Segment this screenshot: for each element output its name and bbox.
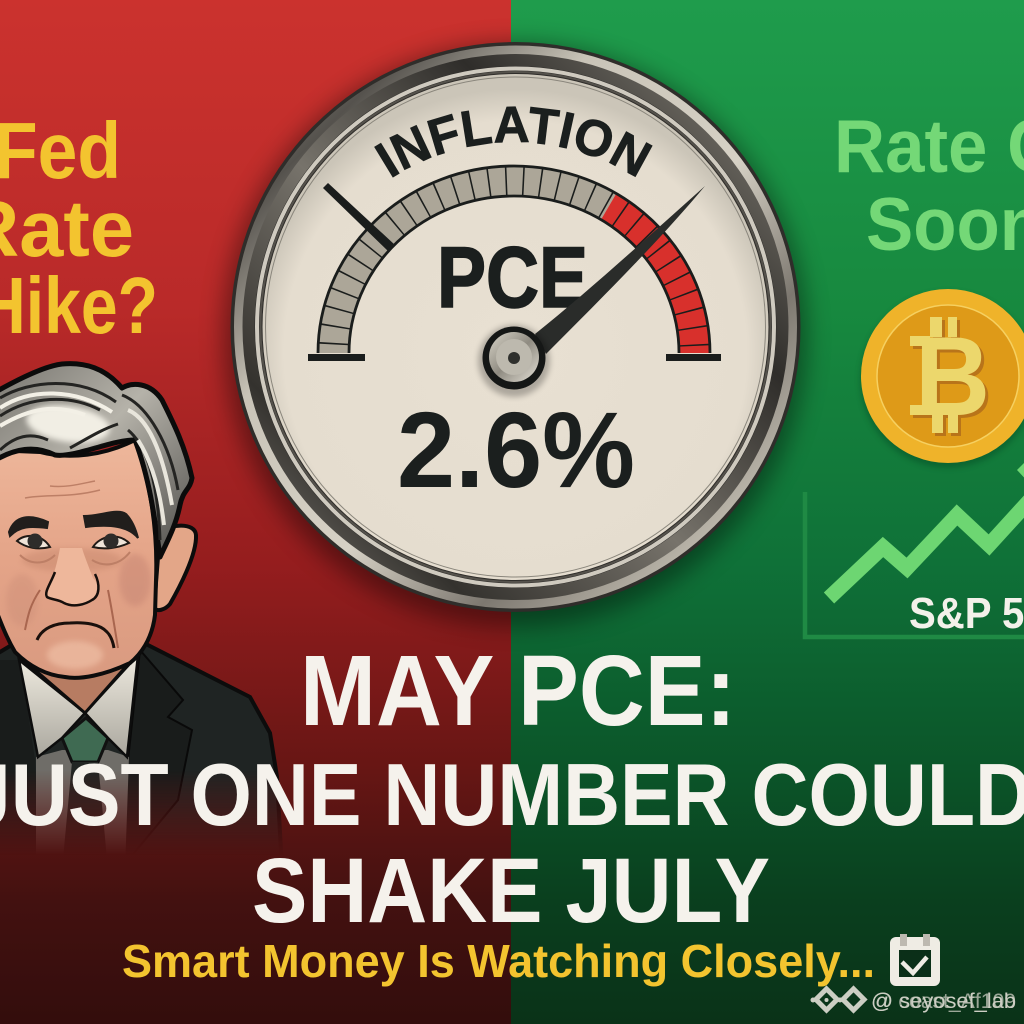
right headline: Rate Cut Soon bbox=[834, 104, 1024, 266]
icon: bitcoin coin: B bbox=[915, 314, 990, 439]
eyes bbox=[17, 536, 50, 548]
nasolabial lines bbox=[25, 590, 118, 648]
scale outlines bbox=[318, 166, 710, 353]
watermark handle: @ seyosef_lab bbox=[871, 990, 1016, 1013]
hair bbox=[0, 364, 192, 557]
watermark bbox=[810, 989, 1016, 1013]
needle bbox=[535, 186, 705, 354]
scale end bars bbox=[308, 354, 365, 361]
icon: bitcoin coin bbox=[860, 289, 1024, 468]
ear bbox=[154, 526, 196, 610]
background: green right panel bbox=[511, 0, 1024, 1024]
chart: S&P 500 line chart bbox=[805, 457, 1024, 638]
inflation gauge bbox=[230, 42, 800, 612]
illustration: Powell portrait bbox=[0, 364, 282, 870]
icon: calendar check bbox=[890, 934, 940, 986]
center label: PCE bbox=[437, 230, 588, 326]
scale ticks bbox=[333, 181, 695, 353]
watermark: @ coast_Af109 bbox=[871, 990, 1016, 1013]
title: MAY PCE: bbox=[300, 635, 736, 747]
subtitle: Smart Money Is Watching Closely... bbox=[122, 935, 875, 987]
scale: grey zone bbox=[333, 180, 609, 353]
lapel bbox=[128, 652, 193, 829]
eye bags bbox=[20, 552, 130, 564]
eyebrows bbox=[9, 517, 48, 536]
left question: Fed Rate Hike? bbox=[0, 106, 158, 350]
suit bbox=[0, 643, 282, 846]
low limit marker bbox=[323, 183, 395, 252]
value: 2.6% bbox=[397, 389, 635, 510]
bezel bbox=[230, 42, 800, 612]
shirt under tie bbox=[36, 750, 129, 848]
title: SHAKE JULY bbox=[252, 840, 770, 942]
dial face bbox=[262, 74, 768, 580]
cheek shading bbox=[119, 554, 151, 606]
hub bbox=[478, 325, 550, 397]
title bbox=[0, 635, 1024, 942]
neck bbox=[28, 665, 124, 714]
tie bbox=[62, 718, 108, 762]
gauge shadow bbox=[223, 43, 807, 627]
forehead wrinkles bbox=[25, 481, 100, 498]
face bbox=[0, 440, 156, 678]
background: red left panel bbox=[0, 0, 512, 1024]
mouth bbox=[37, 623, 114, 648]
collar bbox=[19, 660, 85, 757]
gauge title: INFLATION bbox=[374, 106, 653, 178]
watermark logo bbox=[810, 989, 864, 1010]
scale: red zone bbox=[609, 206, 695, 353]
icon: bitcoin coin: B bbox=[918, 317, 993, 442]
nose bbox=[47, 548, 98, 605]
hair highlights bbox=[24, 400, 112, 448]
